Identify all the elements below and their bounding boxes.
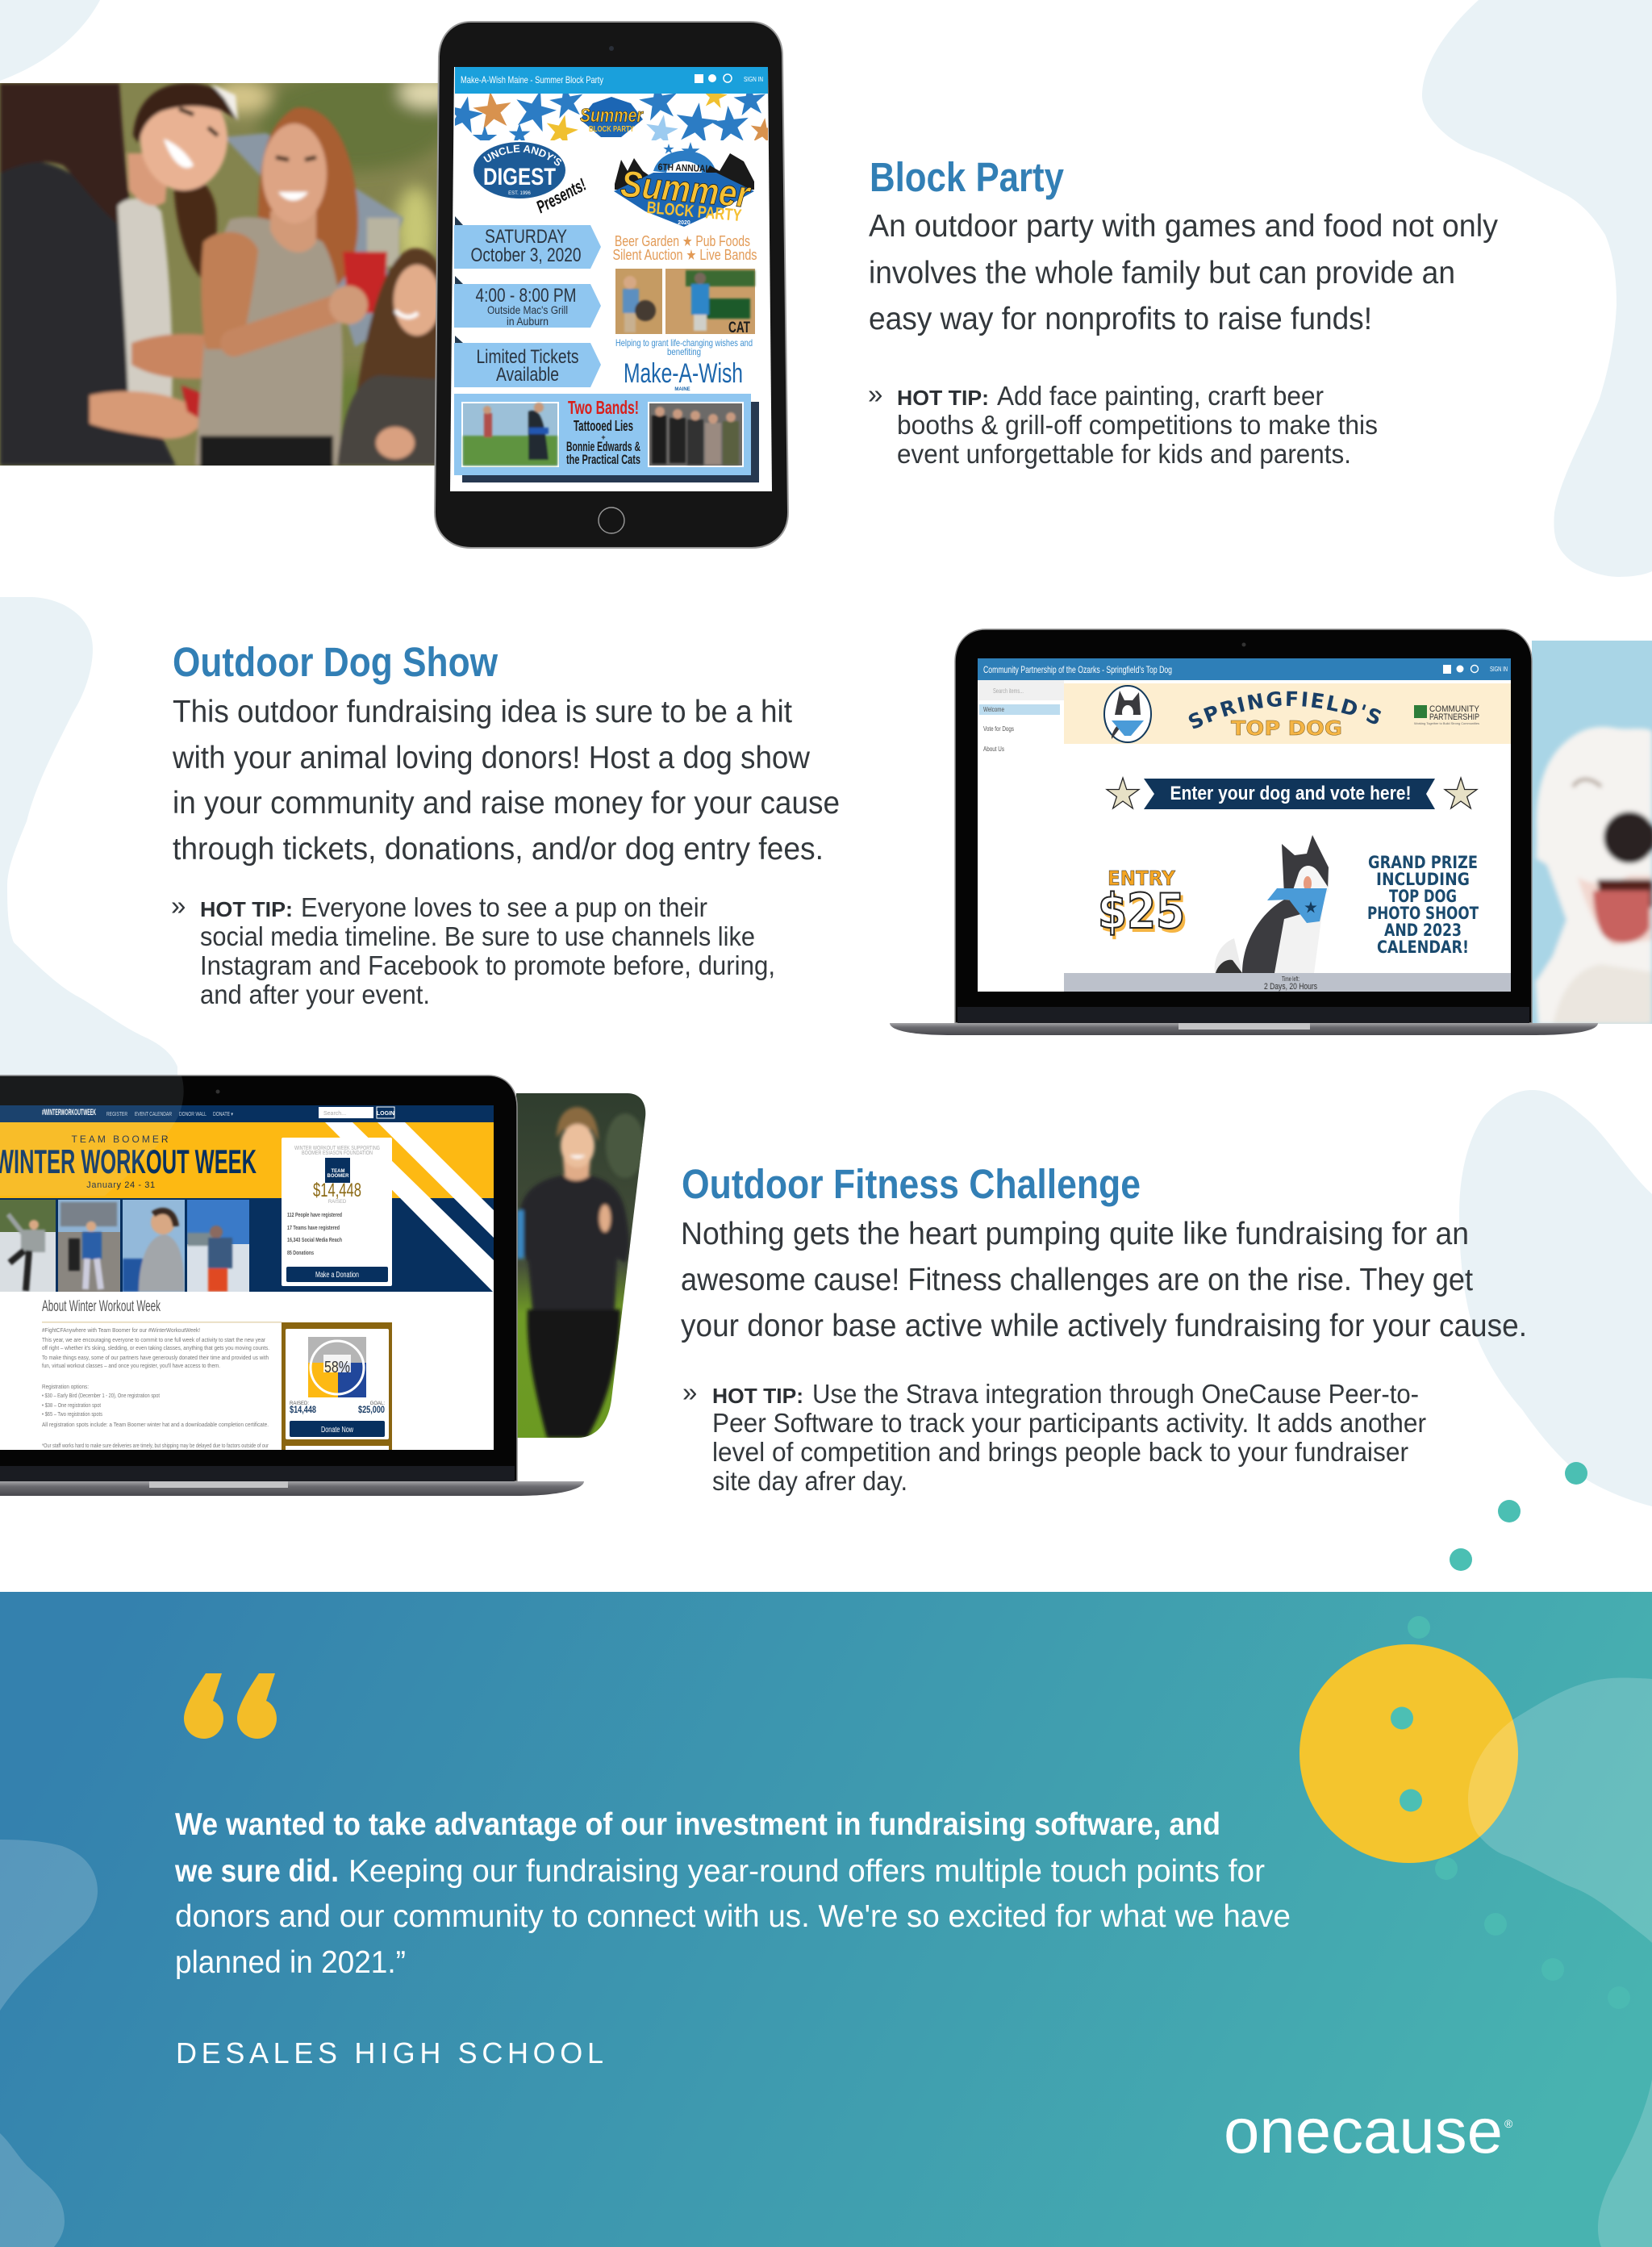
description: outdoor fitness challenge: your donor base active while actively fundraising for your cause. (681, 1309, 1527, 1343)
grand prize text: INCLUDING (1376, 870, 1470, 889)
description: block party (869, 209, 1498, 336)
about copy: Registration options: (42, 1385, 89, 1390)
hero photo strip (0, 1200, 249, 1292)
heading: outdoor dog show: Outdoor Dog Show (173, 639, 498, 685)
event attractions text (613, 233, 757, 263)
photos: kids at games: CAT (728, 320, 750, 336)
hot tip: outdoor fitness challenge: HOT TIP: (712, 1384, 803, 1408)
description: block party: easy way for nonprofits to raise funds! (869, 302, 1372, 336)
site nav bar: EVENT CALENDAR (135, 1112, 172, 1117)
testimonial quote (174, 1807, 1291, 1980)
summer block party logo: BLOCK PARTY (646, 198, 742, 225)
about copy: About Winter Workout Week (42, 1298, 161, 1315)
donation progress widget: RAISED: (290, 1401, 309, 1406)
event attractions text: Silent Auction ★ Live Bands (613, 247, 757, 263)
blob: panel bottom right (1598, 2079, 1652, 2247)
ribbon: enter your dog (1107, 778, 1477, 809)
woman (257, 107, 358, 300)
summer block party logo: 6TH ANNUAL (657, 161, 711, 174)
two bands banner: Tattooed Lies (574, 418, 633, 434)
entry fee: $25 (1098, 883, 1185, 940)
hot tip: block party: Add face painting, crarft beer (997, 381, 1324, 411)
ribbon: enter your dog: Enter your dog and vote here! (1170, 783, 1412, 804)
description: outdoor fitness challenge: awesome cause! Fitness challenges are on the rise. They get (681, 1263, 1473, 1297)
description: outdoor dog show: through tickets, donations, and/or dog entry fees. (173, 832, 824, 867)
donation progress widget: $14,448 (290, 1404, 316, 1415)
site header bar: SIGN IN (1490, 666, 1508, 673)
hot tip: block party: booths & grill-off competitions to make this (897, 410, 1378, 440)
star banner: BLOCK PARTY (589, 125, 634, 134)
hot tip: outdoor fitness challenge: Use the Strava integration through OneCause Peer-to- (812, 1379, 1419, 1409)
girl (173, 170, 217, 282)
top dog banner: SPRINGFIELD'S (1189, 691, 1381, 729)
hot tip: outdoor fitness challenge: site day afrer day. (712, 1466, 907, 1496)
about copy: off right – whether it's skiing, sledding, or even taking classes, anything that gets you moving counts. (42, 1346, 269, 1351)
presents script: Presents! (533, 174, 590, 217)
laptop mockup: springfield's top dog (890, 629, 1598, 1035)
two bands banner: the Practical Cats (566, 452, 640, 467)
make-a-wish block: Make-A-Wish (624, 358, 743, 389)
section: block party (0, 21, 1498, 549)
time arrow (454, 276, 601, 328)
attribution: DESALES HIGH SCHOOL (176, 2036, 603, 2069)
time arrow: in Auburn (507, 315, 549, 328)
faint dots in panel (1408, 1616, 1630, 2009)
description: outdoor dog show (172, 695, 840, 867)
hero banner: January 24 - 31 (86, 1180, 156, 1190)
donation progress widget: $25,000 (358, 1404, 385, 1415)
blob: panel left (0, 1840, 98, 2011)
fundraising stats card: TEAM (331, 1169, 345, 1174)
quote marks (184, 1673, 277, 1739)
description: block party: involves the whole family but can provide an (869, 256, 1455, 290)
tickets arrow: Limited Tickets (476, 346, 579, 368)
hot tip: outdoor dog show: and after your event. (200, 979, 430, 1009)
testimonial quote: we sure did. (174, 1854, 339, 1889)
site sidebar: Search items... (993, 687, 1024, 695)
testimonial quote: Keeping our fundraising year-round offers multiple touch points for (348, 1854, 1265, 1889)
testimonial quote: donors and our community to connect with us. We're so excited for what we have (175, 1899, 1291, 1934)
hot tip: block party: » (868, 379, 882, 409)
site sidebar (978, 680, 1064, 753)
two bands banner: Bonnie Edwards & (566, 439, 640, 454)
tablet header bar: SIGN IN (744, 76, 763, 83)
blob: top right (1422, 0, 1652, 577)
make-a-wish block: benefiting (667, 346, 701, 357)
star banner: Summer (580, 105, 644, 127)
fundraising stats card: 17 Teams have registered (287, 1226, 340, 1231)
star banner (443, 79, 778, 149)
grand prize text: AND 2023 (1384, 921, 1462, 940)
entry fee: ENTRY (1108, 867, 1176, 890)
fundraising stats card: 85 Donations (287, 1251, 314, 1256)
hot tip: outdoor dog show (171, 891, 775, 1009)
time left bar: 2 Days, 20 Hours (1264, 982, 1317, 992)
teal dots on circle (1391, 1707, 1422, 1812)
hot tip: outdoor dog show: social media timeline. Be sure to use channels like (200, 921, 755, 951)
hot tip: outdoor fitness challenge: level of competition and brings people back to your fundraiser (712, 1437, 1408, 1467)
site nav bar: DONATE ▾ (213, 1112, 233, 1117)
hero banner (0, 1122, 494, 1292)
two bands banner: Two Bands! (568, 397, 639, 418)
grand prize text: TOP DOG (1389, 887, 1457, 906)
testimonial quote: planned in 2021.” (175, 1945, 406, 1980)
top dog banner: PARTNERSHIP (1429, 712, 1479, 722)
blob: panel right (1468, 1678, 1652, 1943)
laptop mockup: winter workout week (0, 1075, 584, 1496)
digest logo: DIGEST (483, 164, 556, 190)
about copy: To make things easy, some of our partners have generously donated their time and provided us with (42, 1355, 269, 1361)
fundraising stats card: $14,448 (313, 1180, 361, 1201)
site nav bar: Search... (323, 1111, 346, 1117)
date arrow: SATURDAY (485, 226, 567, 248)
donation progress widget: Donate Now (321, 1426, 354, 1435)
description: outdoor dog show: with your animal loving donors! Host a dog show (172, 741, 811, 775)
two bands banner (454, 394, 759, 482)
summer block party logo: 2020 (678, 220, 690, 226)
tablet mockup (434, 21, 789, 549)
hero banner: TEAM BOOMER (71, 1134, 171, 1145)
summer block party logo (614, 142, 754, 227)
top dog banner: Working Together to Build Strong Communities (1414, 721, 1479, 725)
description: outdoor fitness challenge (681, 1217, 1527, 1343)
about copy: This year, we are encouraging everyone to commit to one full week of activity to start the new year (42, 1338, 266, 1343)
hot tip: block party (868, 379, 1378, 469)
about copy (42, 1298, 282, 1449)
hot tip: outdoor fitness challenge: Peer Software to track your participants activity. It adds another (712, 1408, 1426, 1438)
description: outdoor fitness challenge: Nothing gets the heart pumping quite like fundraising for an (681, 1217, 1469, 1251)
entry fee: $25 (1099, 885, 1188, 944)
site nav bar: #WINTERWORKOUTWEEK (42, 1108, 96, 1117)
heading: outdoor fitness challenge: Outdoor Fitness Challenge (682, 1161, 1141, 1207)
site nav bar (0, 1105, 494, 1122)
fundraising stats card (282, 1138, 392, 1286)
about copy: *Our staff works hard to make sure deliveries are timely, but shipping may be delayed due to factors outside of our (42, 1443, 269, 1449)
fundraising stats card: BOOMER ESIASON FOUNDATION (302, 1151, 373, 1156)
section: outdoor fitness challenge (0, 1075, 1527, 1496)
tablet header bar (455, 67, 768, 94)
fundraising stats card: 112 People have registered (287, 1213, 342, 1218)
donation progress widget (282, 1322, 392, 1450)
photo: woman jogging (516, 1093, 647, 1438)
site header bar: Community Partnership of the Ozarks - Springfield's Top Dog (983, 664, 1172, 675)
grand prize text: GRAND PRIZE (1368, 853, 1478, 872)
child (355, 245, 436, 391)
description: outdoor dog show: This outdoor fundraising idea is sure to be a hit (173, 695, 792, 729)
photo: family laughing outdoors (0, 71, 456, 468)
digest logo: UNCLE ANDY'S (483, 145, 561, 166)
time arrow: 4:00 - 8:00 PM (476, 285, 576, 307)
site sidebar: Welcome (983, 706, 1004, 713)
make-a-wish block: Helping to grant life-changing wishes and (615, 337, 753, 349)
fundraising stats card: BOOMER (327, 1174, 349, 1179)
decorative teal dots (1450, 1462, 1587, 1571)
onecause logo: ® (1504, 2117, 1513, 2130)
tablet header bar: Make-A-Wish Maine - Summer Block Party (461, 74, 603, 86)
hot tip: block party: event unforgettable for kids and parents. (897, 439, 1351, 469)
grand prize text: PHOTO SHOOT (1367, 904, 1479, 923)
left woman (0, 161, 176, 466)
digest logo: EST. 1996 (508, 191, 532, 196)
donation progress widget: GOAL: (370, 1401, 385, 1406)
make-a-wish block (615, 337, 753, 392)
panel: testimonial (0, 1592, 1652, 2247)
about copy: All registration spots include: a Team Boomer winter hat and a downloadable completion certificate. (42, 1422, 269, 1428)
fundraising stats card: WINTER WORKOUT WEEK SUPPORTING (294, 1146, 380, 1151)
hero banner: WINTER WORKOUT WEEK (0, 1142, 257, 1180)
blob: panel bottom left (0, 2133, 65, 2247)
description: outdoor dog show: in your community and raise money for your cause (173, 786, 840, 821)
blob overlay on laptop (0, 1075, 184, 1196)
site header bar (978, 658, 1511, 680)
about copy: fun, virtual workout classes – and once you register, you'll have access to them. (42, 1364, 220, 1369)
description: block party: An outdoor party with games and food not only (869, 209, 1498, 244)
about copy: • $30 – Early Bird (December 1 - 20), One registration spot (42, 1393, 160, 1399)
illustration: border collie with bandana (1215, 835, 1329, 973)
site nav bar: LOGIN (377, 1111, 394, 1117)
site sidebar: About Us (983, 746, 1004, 753)
site nav bar: REGISTER (106, 1112, 127, 1117)
blob: middle left (0, 597, 177, 1210)
digest logo (473, 142, 565, 198)
hot tip: outdoor dog show: » (171, 891, 186, 921)
site sidebar: Vote for Dogs (983, 725, 1014, 733)
summer block party logo: Summer (619, 162, 753, 215)
tickets arrow: Available (496, 364, 559, 386)
fundraising stats card: Make a Donation (315, 1271, 359, 1280)
date arrow (454, 216, 601, 269)
fundraising stats card: 16,343 Social Media Reach (287, 1238, 342, 1243)
top dog banner (1064, 683, 1511, 744)
yellow circle (1299, 1644, 1518, 1863)
about copy: #FightCFAnywhere with Team Boomer for our #WinterWorkoutWeek! (42, 1328, 200, 1334)
testimonial quote: We wanted to take advantage of our investment in fundraising software, and (175, 1807, 1220, 1842)
about copy: • $65 – Two registration spots (42, 1412, 102, 1418)
top dog banner: COMMUNITY (1429, 704, 1480, 714)
hot tip: block party: HOT TIP: (897, 386, 989, 410)
site nav bar: DONOR WALL (179, 1112, 206, 1117)
left woman forearm (90, 391, 203, 439)
time arrow: Outside Mac's Grill (487, 303, 568, 316)
entry fee (1098, 867, 1188, 944)
photo: smiling white dog (1532, 641, 1652, 1025)
fundraising stats card: RAISED (328, 1200, 347, 1205)
grand prize text (1367, 853, 1479, 957)
onecause logo: onecause (1224, 2095, 1503, 2166)
about copy: • $38 – One registration spot (42, 1403, 101, 1409)
hot tip: outdoor dog show: Instagram and Facebook to promote before, during, (200, 950, 775, 980)
heading: block party: Block Party (870, 154, 1065, 200)
hot tip: outdoor dog show: HOT TIP: (200, 897, 293, 921)
hot tip: outdoor fitness challenge: » (682, 1377, 697, 1407)
make-a-wish block: MAINE (674, 387, 690, 392)
hot tip: outdoor dog show: Everyone loves to see a pup on their (301, 892, 707, 922)
top dog banner: TOP DOG (1231, 716, 1342, 740)
time left bar: Time left: (1282, 975, 1299, 983)
time left bar (1064, 973, 1511, 992)
grand prize text: CALENDAR! (1377, 938, 1469, 957)
photos: kids at games (615, 269, 755, 336)
date arrow: October 3, 2020 (471, 244, 581, 266)
tickets arrow (454, 336, 601, 387)
blob: top left (0, 0, 100, 81)
blob: lower right (1459, 1090, 1652, 1506)
section: outdoor dog show (171, 629, 1652, 1035)
two bands banner: + (601, 433, 606, 441)
event attractions text: Beer Garden ★ Pub Foods (615, 233, 750, 249)
hot tip: outdoor fitness challenge (682, 1377, 1426, 1496)
donation progress widget: 58% (324, 1359, 350, 1376)
